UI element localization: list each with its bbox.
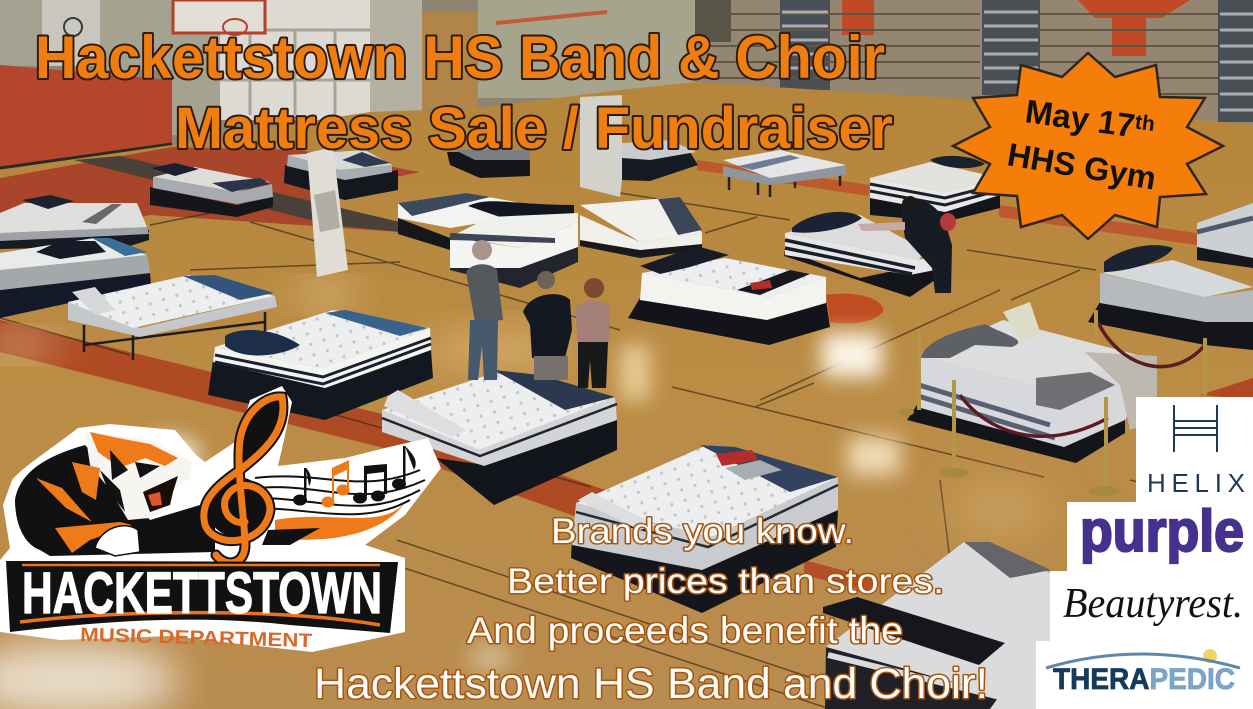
woman in dark top <box>523 271 572 380</box>
orange swoosh <box>275 503 405 540</box>
title: Hackettstown HS Band & Choir <box>35 24 885 91</box>
mattress left of people <box>208 310 433 420</box>
tiger face markings <box>100 450 160 512</box>
three people talking <box>466 240 610 388</box>
treble clef <box>204 397 283 563</box>
mattress upper right under badge <box>870 156 1000 222</box>
mattress centre front <box>382 370 617 505</box>
man <box>466 240 503 380</box>
brand: Therapedic: THERAPEDIC <box>1053 663 1235 696</box>
mattress centre front of group <box>450 213 578 288</box>
mattress back row left <box>150 163 273 217</box>
staff lines <box>255 470 425 514</box>
mattress back row centre <box>447 150 530 178</box>
mattress with worker <box>784 212 935 297</box>
mattress back row right of centre <box>622 140 698 181</box>
display banner left <box>307 147 348 277</box>
badge date text: th <box>1134 111 1156 136</box>
logo department name: MUSIC DEPARTMENT <box>80 624 312 652</box>
logo: Hackettstown Music Department <box>0 386 441 652</box>
logo banner <box>6 561 398 633</box>
mattress far left lower <box>0 238 151 318</box>
tagline text block: Hackettstown HS Band and Choir! <box>314 660 988 708</box>
frame bed left <box>68 275 277 360</box>
title: Mattress Sale / Fundraiser <box>175 96 893 161</box>
tiger forehead and body stripes <box>36 432 178 553</box>
brand: Therapedic <box>1036 641 1253 709</box>
woman in patterned top <box>575 278 610 388</box>
mattress far left top <box>0 195 149 249</box>
worker leaning on mattress <box>858 196 956 293</box>
tagline text block: Better prices than stores. <box>507 562 944 601</box>
tiger mouth <box>143 476 178 512</box>
mattress back row centre left <box>284 150 398 200</box>
mattress centre back <box>398 193 574 250</box>
title <box>35 24 893 161</box>
gold stanchions with red rope <box>898 310 1205 496</box>
logo school name: HACKETTSTOWN <box>22 561 382 626</box>
mattress far right upper <box>1197 203 1253 268</box>
display banner right <box>580 95 622 197</box>
brand logos column <box>1036 397 1253 709</box>
mattress front centre <box>571 445 838 613</box>
brand: Helix <box>1136 397 1253 503</box>
tiger paw <box>95 526 140 556</box>
mattress bottom right <box>823 542 1060 709</box>
mattress far right with pillow <box>1088 245 1253 350</box>
frame bed back right <box>723 150 846 197</box>
tagline text block <box>314 512 988 708</box>
tiger body <box>15 445 215 556</box>
mattress right with stanchions <box>907 302 1157 463</box>
mattress centre right <box>580 197 702 258</box>
music notes <box>293 446 416 508</box>
brand: Helix: HELIX <box>1147 468 1245 498</box>
badge location text: HHS Gym <box>1005 136 1159 197</box>
brand: Purple: purple <box>1080 499 1244 564</box>
brand: Beautyrest: Beautyrest. <box>1063 581 1243 627</box>
tagline text block: Brands you know. <box>551 512 854 551</box>
photo background: gym wall and bleachers <box>0 0 1253 175</box>
badge date text: May 17 <box>1023 92 1137 144</box>
tiger head fur <box>85 432 192 520</box>
logo sticker outline <box>0 386 441 652</box>
mattress centre with black base <box>628 247 830 345</box>
brand: Beautyrest <box>1050 571 1253 642</box>
tagline text block: And proceeds benefit the <box>467 610 903 651</box>
badge: date and location starburst <box>953 53 1223 239</box>
